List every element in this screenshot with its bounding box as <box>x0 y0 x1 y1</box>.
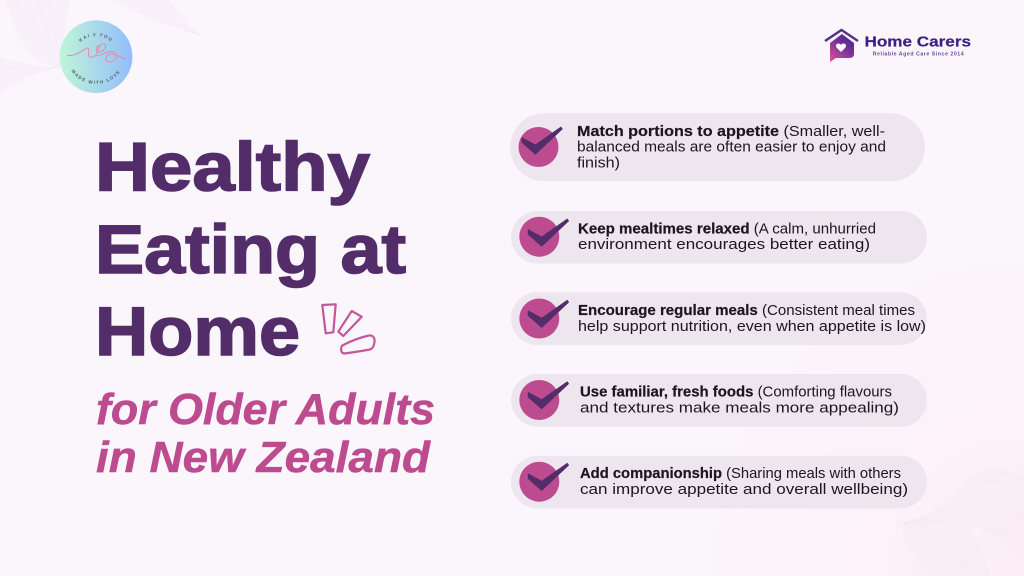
text: regular meals: help support nutrition, even when appetite is low) <box>578 319 926 335</box>
title: Healthy <box>95 128 370 206</box>
panel: companionship <box>511 456 927 508</box>
logo tagline: Reliable Aged Care Since 2014 <box>873 51 964 57</box>
title: Eating at <box>95 211 406 288</box>
icon: check <box>519 298 569 338</box>
text: match portions <box>577 124 886 171</box>
icon: check <box>518 126 563 167</box>
text: relaxed mealtimes <box>578 221 876 253</box>
subtitle: in New Zealand <box>96 433 431 482</box>
text: regular meals <box>578 303 926 335</box>
text: companionship: Add companionship (Sharing meals with others <box>580 466 901 482</box>
subtitle <box>96 385 435 482</box>
text: match portions: finish) <box>577 155 620 171</box>
panel: regular meals <box>511 292 927 345</box>
text: companionship <box>580 466 908 498</box>
icon: check <box>519 380 569 420</box>
icon: sparkle accent <box>322 304 375 354</box>
text: regular meals: Encourage regular meals (Consistent meal times <box>578 303 915 319</box>
title <box>95 128 406 370</box>
text: familiar foods: and textures make meals more appealing) <box>580 400 899 416</box>
badge: made with love: KAI 2 YOU <box>78 33 112 42</box>
panel: match portions <box>510 113 925 181</box>
logo wordmark: Home Carers <box>864 35 971 51</box>
text: match portions: balanced meals are often easier to enjoy and <box>577 140 886 156</box>
panel: relaxed mealtimes <box>511 211 927 264</box>
icon: house with heart <box>825 30 858 62</box>
panel: familiar foods <box>511 374 927 427</box>
text: familiar foods <box>580 385 899 416</box>
subtitle: for Older Adults <box>96 385 435 434</box>
text: match portions: Match portions to appetite (Smaller, well- <box>577 124 885 140</box>
icon: check <box>519 462 569 502</box>
title: Home <box>95 293 300 370</box>
text: relaxed mealtimes: environment encourages better eating) <box>578 237 870 253</box>
logo: Home Carers <box>825 30 971 62</box>
text: companionship: can improve appetite and overall wellbeing) <box>580 482 908 498</box>
text: relaxed mealtimes: Keep mealtimes relaxed (A calm, unhurried <box>578 221 876 237</box>
badge: made with love <box>60 20 132 94</box>
icon: check <box>519 217 569 257</box>
badge: made with love: MADE WITH LOVE <box>72 69 120 84</box>
text: familiar foods: Use familiar, fresh foods (Comforting flavours <box>580 385 892 401</box>
